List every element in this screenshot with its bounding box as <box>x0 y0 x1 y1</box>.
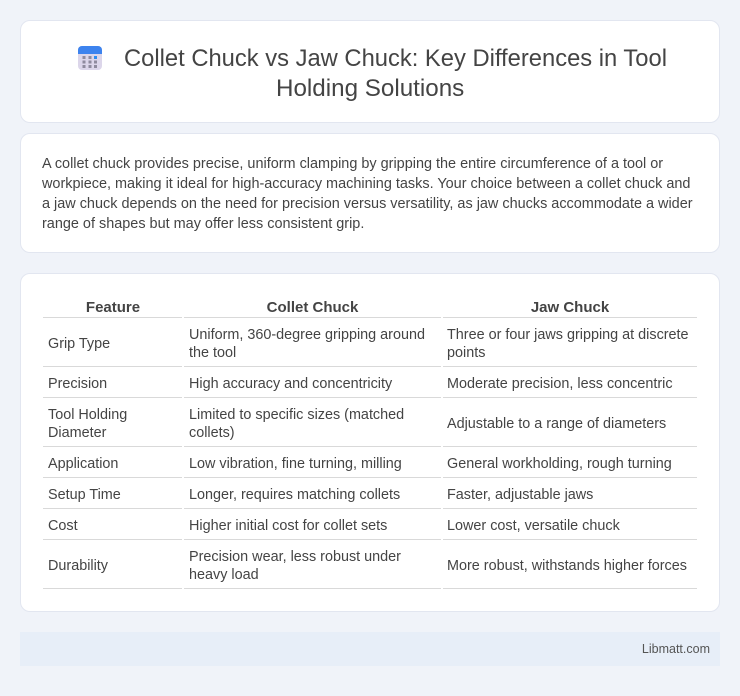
comparison table card: Higher initial cost for collet sets <box>189 518 387 534</box>
comparison table card: Three or four jaws gripping at discrete <box>447 327 689 343</box>
intro text <box>42 156 693 232</box>
comparison table card: heavy load <box>189 567 259 583</box>
comparison table card <box>20 273 720 612</box>
header: Collet Chuck: Collet Chuck <box>267 299 358 316</box>
comparison table card: More robust, withstands higher forces <box>447 558 687 574</box>
intro card <box>20 133 720 253</box>
comparison table card: Limited to specific sizes (matched <box>189 407 404 423</box>
comparison table card: Uniform, 360-degree gripping around <box>189 327 425 343</box>
comparison table card: Precision wear, less robust under <box>189 549 401 565</box>
row: Precision: Precision <box>48 376 107 392</box>
row: Application: Application <box>48 456 118 472</box>
title: Collet Chuck vs Jaw Chuck: Key Differences in Tool <box>124 45 667 72</box>
header: Jaw Chuck: Jaw Chuck <box>531 299 609 316</box>
footer bar <box>20 632 720 666</box>
title <box>124 45 667 102</box>
comparison table card: Lower cost, versatile chuck <box>447 518 620 534</box>
intro text: A collet chuck provides precise, uniform clamping by gripping the entire circumference of a tool or <box>42 156 663 172</box>
row: Tool Holding Diameter <box>48 407 127 441</box>
comparison table card: Low vibration, fine turning, milling <box>189 456 402 472</box>
row: Cost: Cost <box>48 518 78 534</box>
intro text: workpiece, making it ideal for high-accuracy machining tasks. Your choice between a collet chuck and <box>42 176 690 192</box>
row: Tool Holding Diameter: Diameter <box>48 425 106 441</box>
header: Feature: Feature <box>86 299 140 316</box>
comparison table card: Moderate precision, less concentric <box>447 376 673 392</box>
comparison table card: Longer, requires matching collets <box>189 487 400 503</box>
intro text: range of shapes but may offer less consistent grip. <box>42 216 364 232</box>
comparison table card: points <box>447 345 485 361</box>
comparison table card: Faster, adjustable jaws <box>447 487 593 503</box>
comparison table card: collets) <box>189 425 235 441</box>
footer credit: Libmatt.com <box>642 642 710 656</box>
comparison table card: General workholding, rough turning <box>447 456 672 472</box>
row: Grip Type: Grip Type <box>48 336 110 352</box>
comparison table card: High accuracy and concentricity <box>189 376 392 392</box>
title card <box>20 20 720 123</box>
row: Tool Holding Diameter: Tool Holding <box>48 407 127 423</box>
intro text: a jaw chuck depends on the need for precision versus versatility, as jaw chucks accommodate a wider <box>42 196 693 212</box>
row: Durability: Durability <box>48 558 108 574</box>
comparison table card: Adjustable to a range of diameters <box>447 416 666 432</box>
row: Setup Time: Setup Time <box>48 487 121 503</box>
icon: calendar <box>78 46 102 70</box>
comparison table card: the tool <box>189 345 236 361</box>
title: Holding Solutions <box>276 75 464 102</box>
